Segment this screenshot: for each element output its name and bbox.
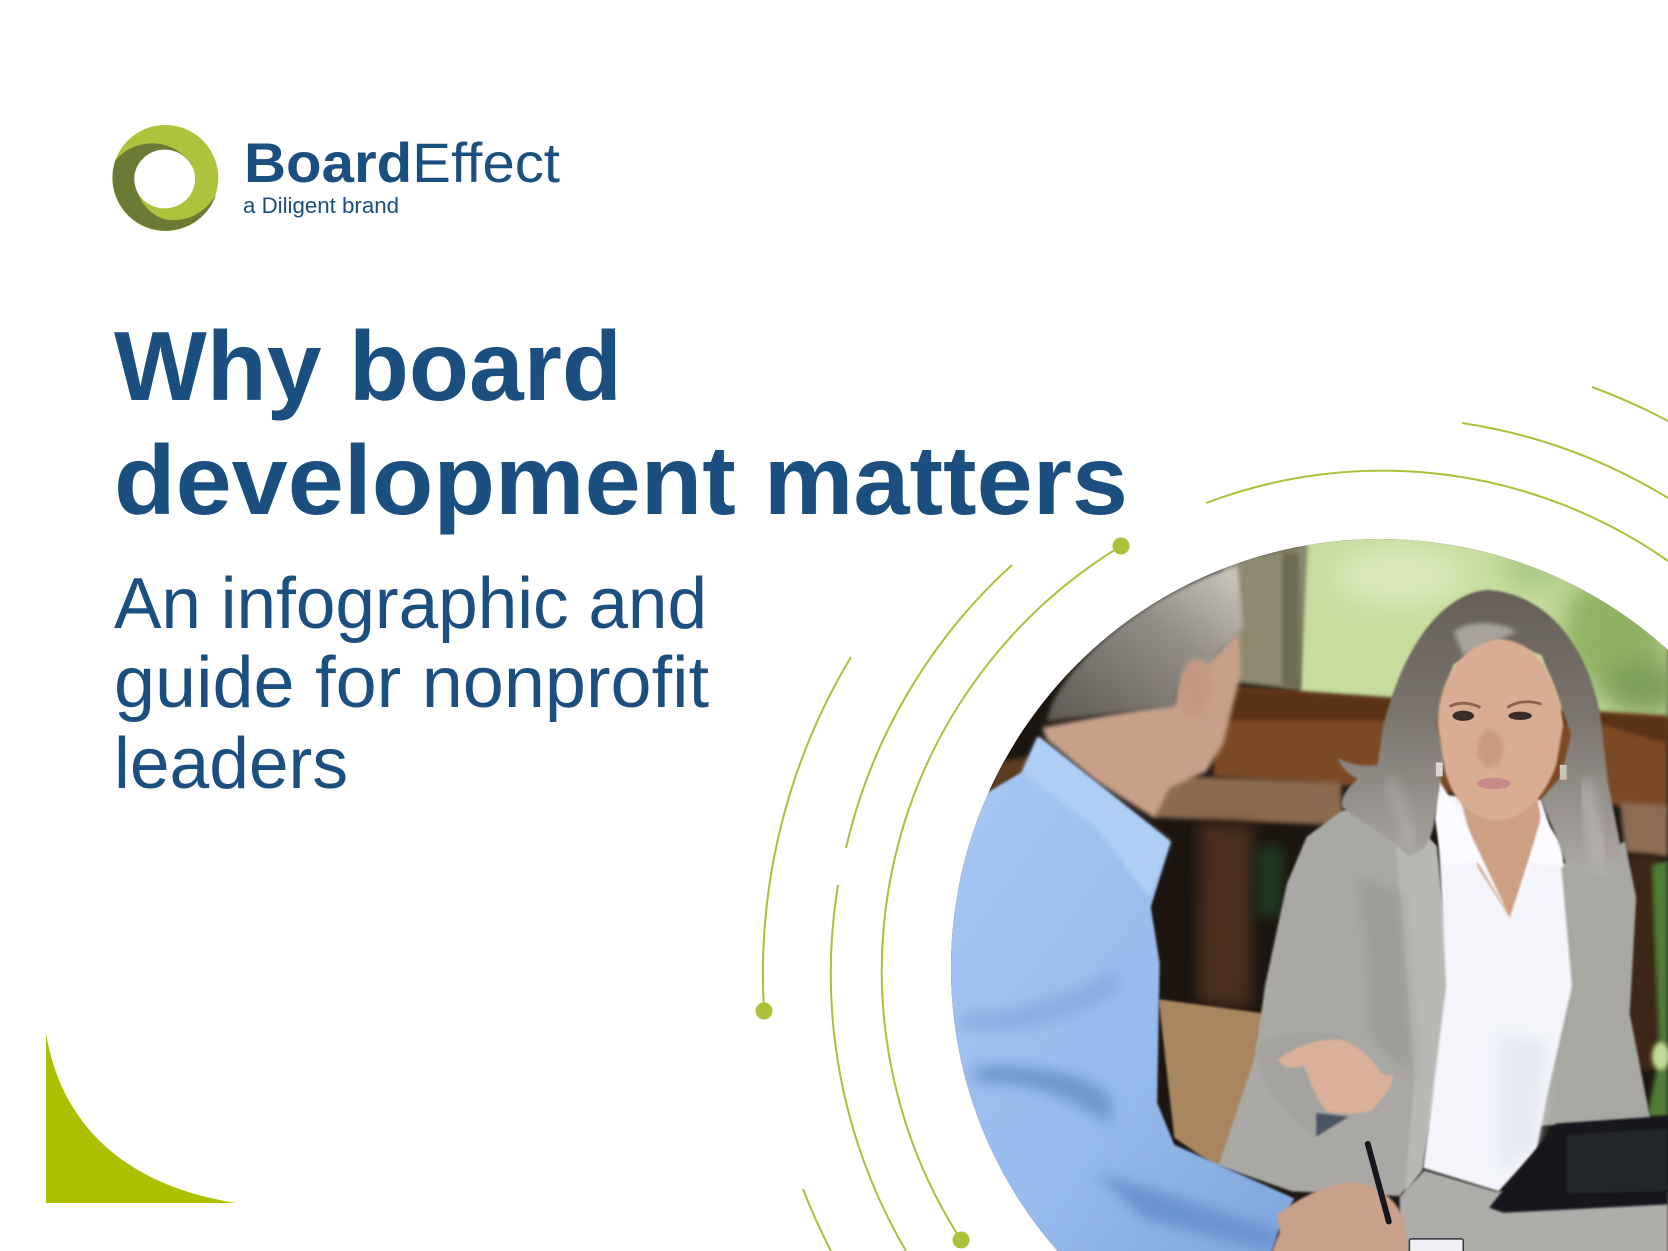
subtitle: An infographic and [114, 564, 707, 644]
phone [1409, 1239, 1463, 1251]
neck and ear [1042, 632, 1241, 818]
hand [1278, 1039, 1393, 1114]
man hand [1270, 1182, 1409, 1251]
sleeve cuff [1254, 1045, 1258, 1053]
blazer left [1218, 795, 1450, 1196]
lips [1477, 778, 1510, 789]
pen [1368, 1144, 1389, 1222]
couch [1159, 999, 1267, 1168]
logo: BoardEffect [112, 125, 560, 231]
corner shape: lime quarter curve [46, 1033, 236, 1203]
icon: green ring [112, 125, 218, 231]
green foliage window [1299, 529, 1668, 720]
subtitle: leaders [114, 724, 348, 804]
eyes [1452, 711, 1474, 721]
logo tagline: a Diligent brand [243, 193, 399, 218]
neck [1461, 795, 1542, 917]
log rail [1155, 775, 1343, 825]
blue shirt [920, 737, 1294, 1251]
dot: top arc [1112, 538, 1130, 554]
face [1438, 639, 1563, 821]
dark posts [1199, 823, 1253, 1007]
trousers [1400, 1170, 1668, 1251]
photo background [900, 520, 1668, 1251]
title: development matters [114, 425, 1128, 535]
white shirt [1423, 795, 1572, 1191]
dot: bottom arc [952, 1232, 970, 1248]
man hair [1047, 567, 1243, 721]
man [920, 567, 1463, 1251]
title [114, 311, 1128, 535]
subtitle [114, 564, 709, 804]
tablet [1489, 1116, 1668, 1213]
wooden beam [1213, 686, 1668, 809]
hair [1337, 590, 1623, 878]
title: Why board [114, 311, 622, 421]
subtitle: guide for nonprofit [114, 643, 709, 723]
blazer right [1532, 842, 1650, 1126]
woman [1218, 590, 1668, 1251]
earrings [1436, 762, 1443, 776]
logo wordmark: BoardEffect [244, 131, 560, 194]
right foliage [1647, 860, 1668, 1117]
dot: outer arc [756, 1002, 772, 1020]
collar [1435, 779, 1507, 912]
beige structure [1223, 543, 1308, 690]
photo: two people in conversation, circular crop [900, 520, 1668, 1251]
concentric arcs with dots [756, 387, 1668, 1251]
